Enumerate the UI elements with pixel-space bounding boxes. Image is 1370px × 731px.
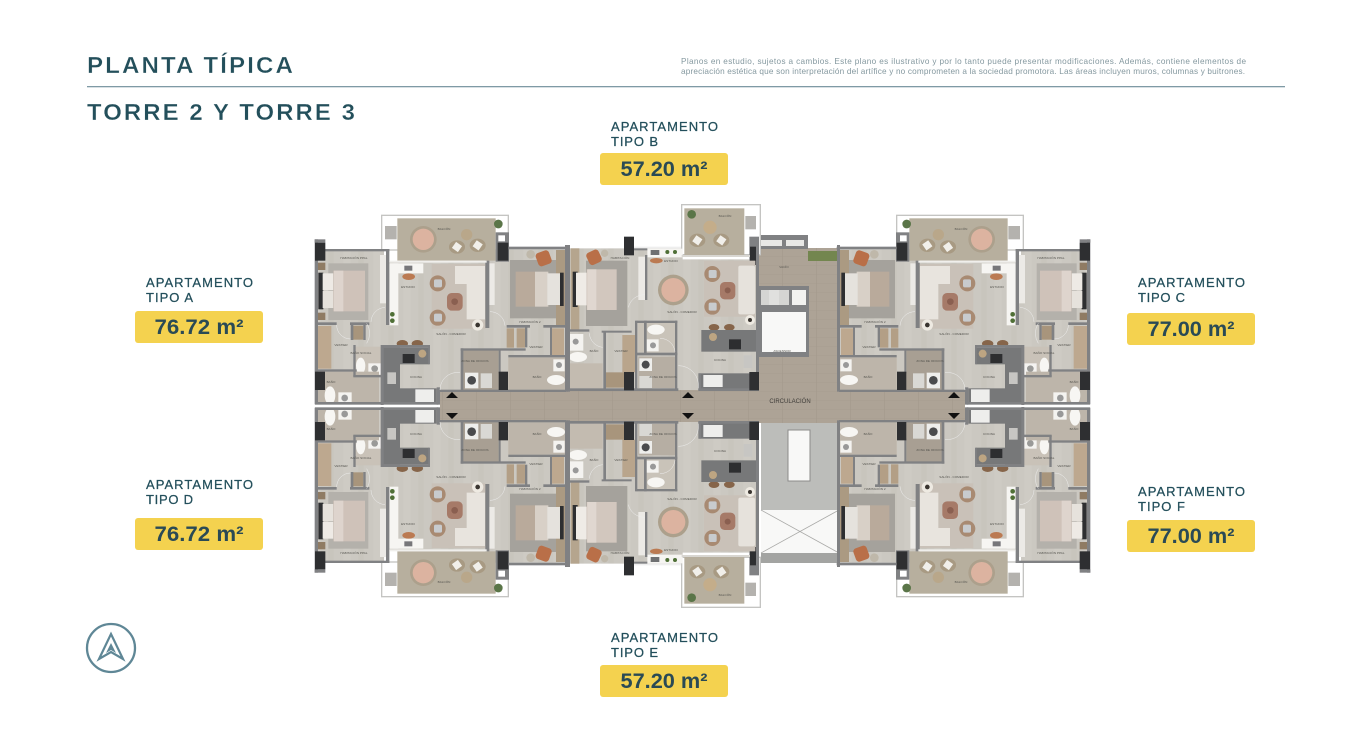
title: PLANTA TÍPICA [87,51,295,78]
room labels: HABITACIÓN PPAL [340,255,368,260]
room labels: HABITACIÓN 2 [864,319,886,324]
core and circulation floor [440,235,965,563]
apartment tipo E plan [567,420,760,607]
room labels: HABITACIÓN 2 [864,486,886,491]
apartment tipo B plan [567,205,760,392]
subtitle: TORRE 2 Y TORRE 3 [87,99,357,125]
room labels: BAÑO [327,379,336,384]
room labels: ZONA DE OFICIOS [916,448,944,452]
room labels: ESTUDIO [990,522,1004,526]
room labels: BAÑO SOCIAL [351,350,372,355]
room labels: ZONA DE OFICIOS [461,448,489,452]
label: tipo E [600,630,728,697]
room labels: COCINA [714,449,727,453]
room labels: VESTIER [862,462,876,466]
room labels: VESTIER [334,343,348,347]
room labels: ZONA DE OFICIOS [461,359,489,363]
label: tipo B [600,119,728,185]
room labels: BALCÓN [438,226,450,231]
label: tipo A: TIPO A [146,290,193,305]
room labels: BALCÓN [438,579,450,584]
label: tipo E: TIPO E [611,645,658,660]
label: tipo A [135,275,263,343]
room labels: ESTUDIO [664,259,678,263]
room labels: BAÑO [327,426,336,431]
apartment tipo D plan [315,407,568,597]
room labels: ESTUDIO [401,522,415,526]
room labels: VESTIER [614,458,628,462]
label: tipo D: 76.72 m² [154,523,244,546]
room labels: BALCÓN [719,592,731,597]
disclaimer text: Planos en estudio, sujetos a cambios. Este plano es ilustrativo y por lo tanto puede presentar modificaciones. Además, contiene elementos de [681,57,1246,66]
room labels: HABITACIÓN PPAL [340,550,368,555]
room labels: COCINA [410,375,423,379]
room labels: BAÑO [590,348,599,353]
circulation label: CIRCULACIÓN [769,398,811,405]
room labels: SALÓN - COMEDOR [667,309,697,314]
room labels: BAÑO SOCIAL [1034,455,1055,460]
room labels: ESTUDIO [401,285,415,289]
room labels: BAÑO [864,431,873,436]
room labels: BAÑO [590,457,599,462]
label: tipo A: 76.72 m² [154,316,244,339]
label: tipo E: 57.20 m² [620,670,708,693]
apartment tipo F plan [837,407,1090,597]
room labels: SALÓN - COMEDOR [436,331,466,336]
room labels: HABITACIÓN [611,255,629,260]
room labels: ZONA DE OFICIOS [649,432,677,436]
room labels: COCINA [714,358,727,362]
floor plan [315,205,1090,607]
room labels: ZONA DE OFICIOS [916,359,944,363]
label: tipo D: APARTAMENTO [146,477,253,492]
room labels: ZONA DE OFICIOS [649,375,677,379]
room labels: ASCENSOR [773,349,791,353]
icon: compass logo [87,624,135,672]
room labels: HABITACIÓN PPAL [1037,255,1065,260]
room labels: BAÑO SOCIAL [351,455,372,460]
room labels: BAÑO SOCIAL [1034,350,1055,355]
disclaimer text [681,57,1246,76]
label: tipo F: APARTAMENTO [1138,484,1245,499]
label: tipo F [1127,484,1255,552]
room labels: BALCÓN [955,226,967,231]
disclaimer text: apreciación estética que son interpretación del artífice y no comprometen a la sociedad promotora. Las áreas incluyen muros, columnas y buitrones. [681,67,1245,76]
room labels: HABITACIÓN 2 [519,486,541,491]
label: tipo D [135,477,263,550]
room labels: COCINA [410,432,423,436]
label: tipo E: APARTAMENTO [611,630,718,645]
label: tipo B: 57.20 m² [620,158,708,181]
room labels: BAÑO [533,374,542,379]
room labels: VACÍO [779,265,789,269]
room labels: SALÓN - COMEDOR [939,331,969,336]
apartment tipo A plan [315,215,568,405]
label: tipo C: APARTAMENTO [1138,275,1245,290]
room labels: VESTIER [334,464,348,468]
entry arrows [446,392,960,419]
room labels: SALÓN - COMEDOR [436,474,466,479]
room labels: BAÑO [864,374,873,379]
room labels: VESTIER [1057,343,1071,347]
room labels: BAÑO [533,431,542,436]
label: tipo C: 77.00 m² [1148,318,1234,341]
label: tipo F: 77.00 m² [1148,525,1234,548]
label: tipo A: APARTAMENTO [146,275,253,290]
room labels: ESTUDIO [664,548,678,552]
room labels: HABITACIÓN PPAL [1037,550,1065,555]
label: tipo B: APARTAMENTO [611,119,718,134]
room labels [327,213,1079,597]
room labels: SALÓN - COMEDOR [939,474,969,479]
room labels: ESTUDIO [990,285,1004,289]
room labels: BALCÓN [719,213,731,218]
room labels: BAÑO [1070,426,1079,431]
room labels: HABITACIÓN [611,550,629,555]
room labels: SALÓN - COMEDOR [667,496,697,501]
room labels: BAÑO [1070,379,1079,384]
room labels: VESTIER [614,349,628,353]
apartment tipo C plan [837,215,1090,405]
room labels: VESTIER [862,345,876,349]
room labels: VESTIER [529,462,543,466]
label: tipo C [1127,275,1255,345]
room labels: VESTIER [529,345,543,349]
room labels: VESTIER [1057,464,1071,468]
room labels: HABITACIÓN 2 [519,319,541,324]
label: tipo D: TIPO D [146,492,193,507]
room labels: COCINA [983,432,996,436]
room labels: COCINA [983,375,996,379]
label: tipo B: TIPO B [611,134,658,149]
room labels: BALCÓN [955,579,967,584]
label: tipo C: TIPO C [1138,290,1185,305]
label: tipo F: TIPO F [1138,499,1185,514]
